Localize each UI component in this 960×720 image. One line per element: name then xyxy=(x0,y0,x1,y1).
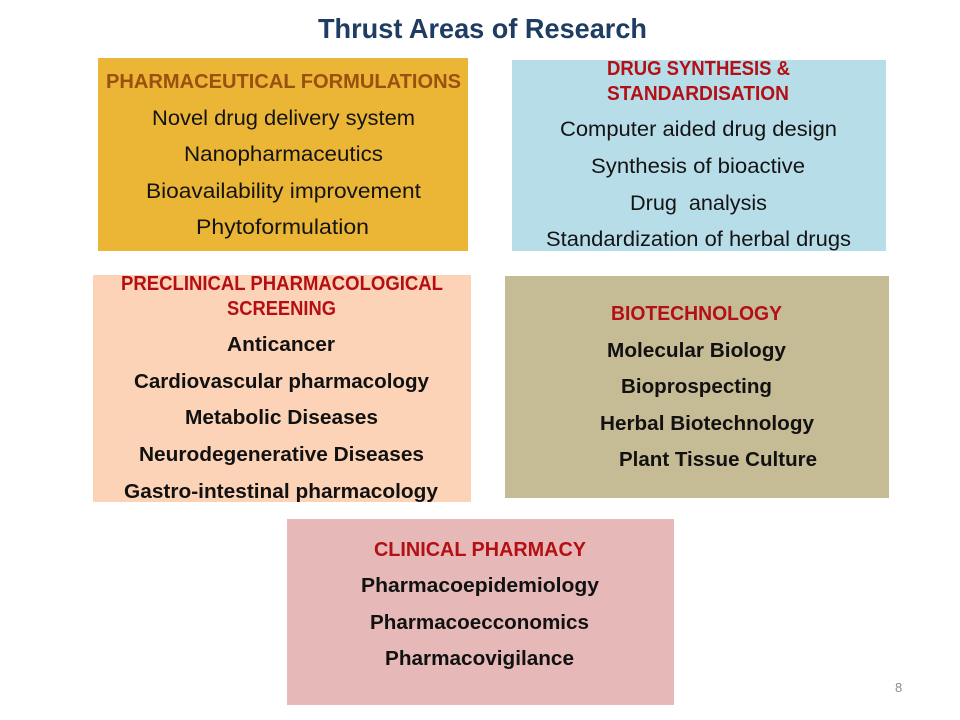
heading: pharmaceutical formulations: PHARMACEUTICAL FORMULATIONS xyxy=(106,71,461,93)
heading: drug synthesis and standardisation xyxy=(607,58,790,105)
heading: preclinical pharmacological screening: SCREENING xyxy=(227,298,336,320)
list: clinical pharmacy topics: Pharmacovigilance xyxy=(385,648,574,670)
title: Thrust Areas of Research xyxy=(318,13,647,44)
panel: preclinical pharmacological screening xyxy=(93,273,471,503)
panel: biotechnology xyxy=(505,276,889,498)
list: drug synthesis topics xyxy=(546,118,851,251)
list: biotechnology topics: Bioprospecting xyxy=(621,376,772,398)
list: biotechnology topics: Herbal Biotechnology xyxy=(600,413,815,435)
panel: clinical pharmacy xyxy=(287,519,674,705)
heading: preclinical pharmacological screening xyxy=(121,273,443,320)
heading: drug synthesis and standardisation: DRUG SYNTHESIS & xyxy=(607,58,790,80)
heading: preclinical pharmacological screening: PRECLINICAL PHARMACOLOGICAL xyxy=(121,273,443,295)
list: drug synthesis topics: Computer aided drug design xyxy=(560,118,837,141)
list: preclinical topics xyxy=(124,334,439,503)
heading: clinical pharmacy: CLINICAL PHARMACY xyxy=(374,539,587,561)
list: formulation topics: Phytoformulation xyxy=(196,216,369,239)
panel: pharmaceutical formulations xyxy=(98,58,468,251)
heading: drug synthesis and standardisation: STANDARDISATION xyxy=(607,83,789,105)
list: preclinical topics: Anticancer xyxy=(227,334,335,356)
list: clinical pharmacy topics: Pharmacoepidemiology xyxy=(361,575,600,597)
list: preclinical topics: Cardiovascular pharmacology xyxy=(134,371,430,393)
page number: 8 xyxy=(895,680,902,695)
list: formulation topics: Novel drug delivery system xyxy=(152,107,415,130)
list: biotechnology topics: Molecular Biology xyxy=(607,340,787,362)
list: drug synthesis topics: Synthesis of bioactive xyxy=(591,155,805,178)
list: preclinical topics: Gastro-intestinal pharmacology xyxy=(124,481,439,503)
list: biotechnology topics: Plant Tissue Culture xyxy=(619,449,817,471)
list: clinical pharmacy topics xyxy=(361,575,600,670)
list: formulation topics: Nanopharmaceutics xyxy=(184,143,383,166)
list: formulation topics xyxy=(146,107,421,239)
list: biotechnology topics xyxy=(600,340,817,471)
list: clinical pharmacy topics: Pharmacoecconomics xyxy=(370,612,589,634)
list: preclinical topics: Metabolic Diseases xyxy=(185,407,378,429)
heading: biotechnology: BIOTECHNOLOGY xyxy=(611,303,783,325)
list: drug synthesis topics: Drug analysis xyxy=(630,192,767,215)
list: drug synthesis topics: Standardization of herbal drugs xyxy=(546,228,851,251)
list: formulation topics: Bioavailability improvement xyxy=(146,180,421,203)
list: preclinical topics: Neurodegenerative Diseases xyxy=(139,444,424,466)
panel: drug synthesis and standardisation xyxy=(512,58,886,251)
